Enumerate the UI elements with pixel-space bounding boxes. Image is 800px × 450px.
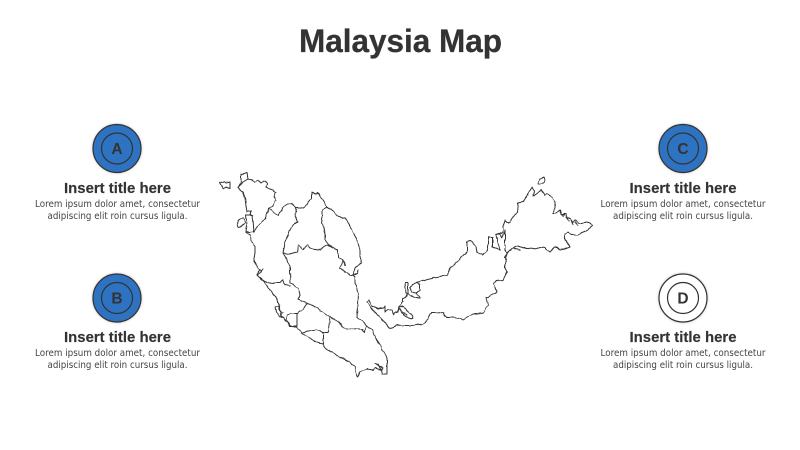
icon: badge B	[93, 274, 141, 322]
icon: badge D	[659, 274, 707, 322]
text block: A: adipiscing elit roin cursus ligula.	[48, 211, 188, 222]
panel: A	[35, 124, 201, 222]
heading: D: Insert title here	[630, 330, 736, 346]
text block: B	[35, 348, 201, 371]
text block: A	[35, 199, 201, 222]
text block: C: Lorem ipsum dolor amet, consectetur	[600, 199, 766, 210]
map: Peninsular Malaysia	[220, 173, 387, 377]
panel: B	[35, 274, 201, 371]
heading: A: Insert title here	[64, 181, 171, 197]
icon: badge A: A	[111, 141, 123, 158]
panel: D	[600, 274, 766, 371]
map of Malaysia	[220, 173, 592, 377]
text block: D: adipiscing elit roin cursus ligula.	[613, 360, 753, 371]
text block: B: adipiscing elit roin cursus ligula.	[48, 360, 188, 371]
panel: C	[600, 124, 766, 222]
map: Sarawak	[367, 230, 520, 328]
text block: C: adipiscing elit roin cursus ligula.	[613, 211, 753, 222]
icon: badge C	[659, 124, 707, 172]
heading: C: Insert title here	[630, 181, 736, 197]
heading: B: Insert title here	[64, 330, 171, 346]
text block: D	[600, 348, 766, 371]
text block: B: Lorem ipsum dolor amet, consectetur	[35, 348, 201, 359]
map: Sabah	[497, 177, 592, 258]
text block: C	[600, 199, 766, 222]
icon: badge C: C	[677, 141, 689, 158]
text block: A: Lorem ipsum dolor amet, consectetur	[35, 199, 201, 210]
text block: D: Lorem ipsum dolor amet, consectetur	[600, 348, 766, 359]
icon: badge D: D	[677, 290, 689, 308]
icon: badge A	[93, 124, 141, 172]
icon: badge B: B	[111, 290, 123, 308]
title: Malaysia Map	[299, 23, 502, 59]
